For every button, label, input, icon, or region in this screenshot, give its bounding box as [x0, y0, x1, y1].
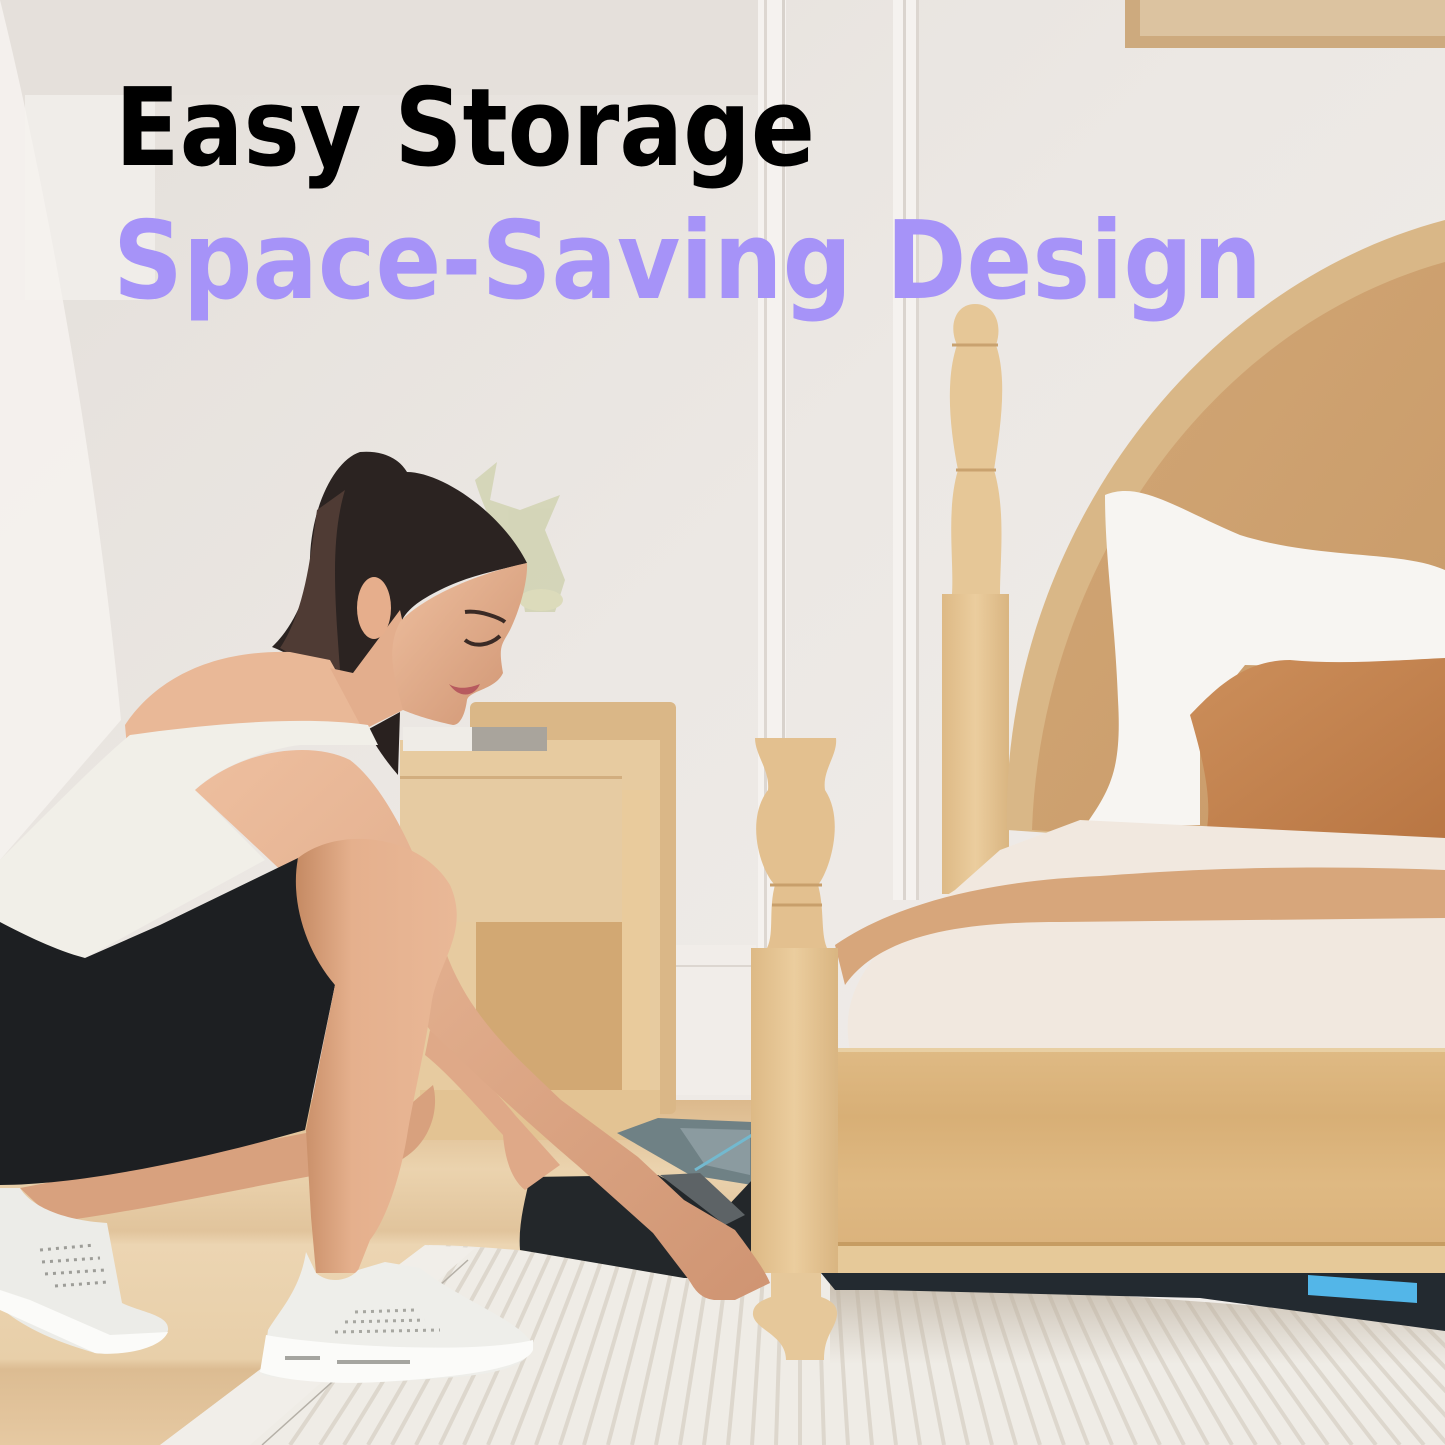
nightstand — [400, 702, 676, 1140]
treadmill deck — [821, 1273, 1445, 1331]
wall art frame — [1125, 0, 1445, 48]
orange pillow — [1190, 658, 1445, 838]
bed post: back — [942, 304, 1009, 894]
eye and brow — [465, 612, 505, 645]
mattress and blanket — [835, 820, 1445, 1050]
thigh and shin — [296, 839, 457, 1273]
floor — [0, 1100, 760, 1445]
rug — [160, 1245, 1445, 1445]
plant — [475, 462, 565, 612]
ponytail and hair — [272, 452, 527, 680]
books on nightstand — [403, 727, 547, 751]
subtitle: Space-Saving Design: Space-Saving Design — [113, 199, 1262, 324]
bed post: front — [751, 738, 838, 1360]
curtain — [0, 0, 121, 860]
ear — [357, 577, 391, 639]
title: Easy Storage: Easy Storage — [115, 66, 815, 191]
shoulder and back skin — [125, 652, 372, 780]
bed frame rail — [835, 1048, 1445, 1273]
woman crouching — [0, 452, 770, 1383]
far forearm and hand — [425, 1030, 560, 1190]
headboard — [1007, 220, 1445, 860]
neck — [330, 610, 420, 730]
tank top — [0, 721, 378, 958]
front shoe — [260, 1252, 533, 1383]
hair behind neck — [367, 712, 400, 775]
white pillow — [1085, 491, 1445, 826]
rear leg — [20, 1085, 435, 1222]
shorts — [0, 858, 335, 1185]
lips — [449, 684, 480, 695]
near arm and hand — [195, 750, 770, 1300]
face — [392, 563, 527, 725]
treadmill under bed — [520, 1118, 1445, 1331]
rear shoe — [0, 1188, 168, 1354]
